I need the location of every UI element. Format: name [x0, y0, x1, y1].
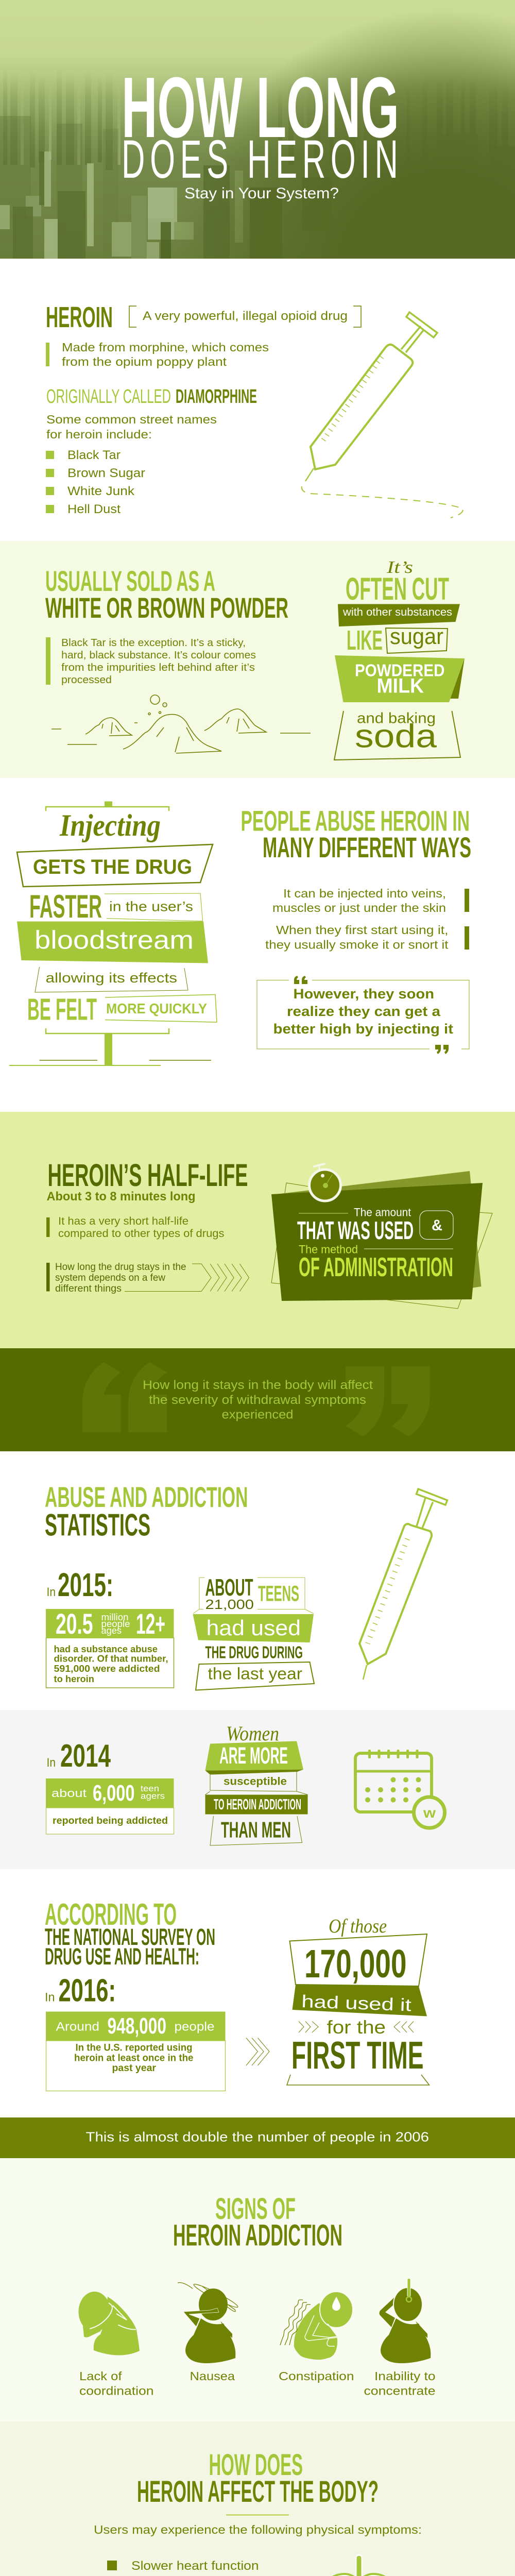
heading: usually sold	[45, 565, 288, 624]
stat card: 20.5 million: ages	[101, 1625, 122, 1636]
often cut typographic block: soda	[355, 717, 437, 754]
injecting signpost: in the user’s	[109, 899, 193, 914]
icon: constipation	[280, 2292, 353, 2360]
quote text: the severity of withdrawal symptoms	[149, 1393, 366, 1407]
methods of use: When they first start using it,	[276, 923, 448, 937]
panel: national survey 2016	[0, 1869, 515, 2117]
street names list: Black Tar	[67, 448, 121, 462]
heading: according to	[45, 1897, 215, 1970]
short half-life note	[46, 1215, 224, 1240]
street names intro: for heroin include:	[46, 428, 152, 441]
heading: signs: HEROIN ADDICTION	[173, 2218, 342, 2252]
methods of use: they usually smoke it or snort it	[265, 938, 449, 951]
stat card: 948,000 people: In the U.S. reported using	[75, 2042, 193, 2054]
often cut typographic block: with other substances	[342, 606, 452, 618]
injecting signpost: MORE QUICKLY	[106, 1001, 207, 1016]
often cut typographic block: LIKE	[347, 625, 383, 656]
title: how long does heroin: Stay in Your System?	[184, 185, 339, 202]
heading: signs	[173, 2192, 342, 2252]
icon: lack of coordination	[78, 2292, 140, 2355]
women susceptible typographic block: ARE MORE	[219, 1742, 288, 1769]
first time typographic block	[287, 1916, 430, 2085]
black tar note: from the impurities left behind after it’s	[61, 662, 255, 673]
icon: heart with exclamation	[325, 2554, 392, 2576]
street names intro	[46, 413, 217, 441]
icon: syringe	[359, 1489, 447, 1680]
panel: half-life	[0, 1112, 515, 1348]
stat card: 6,000 teenagers: agers	[141, 1791, 165, 1801]
year: 2016: In	[45, 1991, 55, 2004]
definition in brackets	[129, 306, 361, 327]
city skyline photo	[0, 0, 515, 260]
first time typographic block: 170,000	[304, 1942, 407, 1986]
injecting signpost: Injecting	[59, 808, 161, 842]
icon: syringe	[302, 312, 463, 518]
often cut typographic block: MILK	[377, 675, 424, 698]
stat card: 948,000 people: Around	[56, 2020, 99, 2034]
injecting signpost: FASTER	[29, 889, 102, 925]
stat card: 948,000 people: 948,000	[107, 2013, 166, 2039]
stat card: 948,000 people: past year	[112, 2063, 157, 2074]
street names list: Brown Sugar	[67, 466, 145, 480]
heading: statistics	[45, 1481, 248, 1543]
first time typographic block: for the	[327, 2016, 386, 2038]
street names list: White Junk	[67, 484, 135, 498]
injecting signpost: BE FELT	[27, 992, 97, 1026]
sign labels: Constipation	[279, 2369, 354, 2383]
callout: injecting quote	[257, 976, 469, 1054]
arrow: chevrons	[246, 2038, 269, 2065]
stat card: 6,000 teenagers: 6,000	[93, 1781, 135, 1806]
teens typographic block: 21,000	[205, 1597, 254, 1612]
stat card: 948,000 people	[46, 2011, 226, 2091]
dependency note	[46, 1262, 186, 1294]
stat card: 20.5 million: to heroin	[54, 1674, 94, 1684]
sign labels: Nausea	[190, 2369, 235, 2383]
year: 2015: 2015:	[58, 1566, 113, 1603]
stat card: 6,000 teenagers: about	[52, 1787, 87, 1800]
banner: almost double	[0, 2117, 515, 2158]
dependency note: system depends on a few	[55, 1273, 165, 1283]
icon: nausea	[178, 2282, 239, 2363]
stat card: 20.5 million: million	[101, 1612, 129, 1622]
teens typographic block: TEENS	[258, 1582, 299, 1606]
icon: powder piles	[52, 695, 311, 753]
injecting signpost: bloodstream	[35, 925, 194, 954]
icon: calendar: w	[423, 1805, 436, 1821]
arrow: chevrons	[125, 1264, 249, 1291]
methods of use: muscles or just under the skin	[272, 901, 446, 914]
year: 2015: In	[46, 1585, 56, 1599]
subheading: diamorphine: DIAMORPHINE	[176, 386, 257, 408]
quote text: experienced	[221, 1408, 294, 1422]
stat card: 20.5 million: 591,000 were addicted	[54, 1664, 160, 1674]
heading: many different ways	[241, 805, 471, 863]
heading: how does heroin affect: HOW DOES	[209, 2448, 303, 2482]
women susceptible typographic block: TO HEROIN ADDICTION	[214, 1797, 301, 1813]
stat card: 6,000 teenagers: teen	[141, 1784, 159, 1793]
card: amount and method: &	[432, 1217, 442, 1234]
icon: inability to concentrate	[379, 2278, 431, 2363]
heading: half-life: HEROIN’S HALF-LIFE	[47, 1158, 248, 1193]
icon: calendar	[355, 1750, 445, 1828]
heading: usually sold: USUALLY SOLD AS A	[45, 565, 215, 597]
methods of use: It can be injected into veins,	[283, 887, 446, 900]
heading: heroin: HEROIN	[46, 301, 113, 334]
heading: half-life: About 3 to 8 minutes long	[46, 1190, 196, 1204]
panel: injecting and ways of abuse	[0, 778, 515, 1112]
physical symptoms list	[107, 2559, 268, 2576]
women susceptible typographic block: susceptible	[224, 1775, 287, 1788]
first time typographic block: FIRST TIME	[291, 2033, 423, 2077]
panel: 2014 women statistics	[0, 1710, 515, 1869]
card: amount and method: The method	[299, 1243, 358, 1256]
injecting signpost: GETS THE DRUG	[33, 856, 192, 878]
morphine note: Made from morphine, which comes	[62, 341, 269, 354]
stat card: 6,000 teenagers: reported being addicted	[53, 1816, 168, 1826]
teens typographic block: ABOUT	[205, 1574, 253, 1601]
year: 2014: In	[46, 1756, 56, 1770]
quote text: How long it stays in the body will affect	[143, 1378, 373, 1392]
stat card: 20.5 million: people	[101, 1619, 130, 1629]
sign labels	[79, 2369, 436, 2398]
heading: according to: DRUG USE AND HEALTH:	[45, 1943, 199, 1970]
callout: injecting quote: better high by injecting it	[273, 1021, 453, 1037]
panel: abuse and addiction statistics	[0, 1451, 515, 1710]
heading: signs: SIGNS OF	[215, 2192, 296, 2226]
year: 2016: 2016:	[59, 1973, 116, 2008]
teens typographic block: THE DRUG DURING	[205, 1642, 303, 1662]
panel: what is heroin	[0, 259, 515, 541]
stat card: 948,000 people: heroin at least once in the	[74, 2053, 194, 2064]
heading: half-life	[46, 1158, 248, 1204]
icon: stopwatch	[309, 1164, 341, 1201]
street names list: Hell Dust	[67, 502, 121, 516]
black tar note: Black Tar is the exception. It’s a sticky,	[61, 637, 246, 649]
card: amount and method: The amount	[354, 1206, 411, 1219]
injecting signpost: allowing its effects	[45, 970, 177, 986]
dependency note: different things	[55, 1283, 122, 1294]
quote text	[143, 1378, 373, 1422]
definition in brackets: A very powerful, illegal opioid drug	[143, 309, 348, 323]
panel: severity quote band	[0, 1348, 515, 1451]
card: amount and method	[271, 1164, 492, 1309]
heading: how does heroin affect	[137, 2448, 379, 2509]
often cut typographic block: and baking	[357, 710, 436, 726]
heading: statistics: STATISTICS	[45, 1507, 150, 1543]
short half-life note: It has a very short half-life	[58, 1215, 188, 1227]
heading: according to: ACCORDING TO	[45, 1897, 177, 1931]
decorative quote marks	[82, 1362, 430, 1436]
sign labels: concentrate	[364, 2384, 436, 2398]
often cut typographic block: It’s	[386, 558, 413, 577]
first time typographic block: Of those	[329, 1916, 387, 1937]
teens typographic block: the last year	[208, 1664, 302, 1683]
physical symptoms list: Slower heart function	[131, 2559, 259, 2573]
year: 2015	[46, 1566, 113, 1603]
stat card: 20.5 million: disorder. Of that number,	[54, 1654, 168, 1664]
stat card: 948,000 people: people	[174, 2020, 214, 2034]
title: how long does heroin	[122, 60, 399, 202]
short half-life note: compared to other types of drugs	[58, 1228, 224, 1240]
panel: how heroin affects the body	[0, 2421, 515, 2576]
morphine note: from the opium poppy plant	[62, 355, 227, 368]
black tar note	[46, 637, 256, 686]
title: how long does heroin: DOES HEROIN	[122, 130, 398, 190]
first time typographic block: had used it	[301, 1992, 412, 2015]
panel: signs of heroin addiction	[0, 2158, 515, 2421]
panel: hero banner	[0, 0, 515, 260]
injecting signpost	[9, 802, 217, 1065]
year: 2016	[45, 1973, 116, 2008]
subheading: diamorphine: ORIGINALLY CALLED	[46, 386, 171, 408]
dependency note: How long the drug stays in the	[55, 1262, 186, 1273]
stat card: 6,000 teenagers	[46, 1778, 174, 1834]
often cut typographic block: POWDERED	[355, 660, 445, 680]
teens typographic block	[193, 1574, 314, 1690]
stat card: 20.5 million	[46, 1607, 174, 1688]
intro text: Users may experience the following physical symptoms:	[94, 2523, 422, 2536]
women susceptible typographic block	[205, 1722, 308, 1845]
card: amount and method: THAT WAS USED	[297, 1217, 414, 1245]
sign labels: coordination	[79, 2384, 153, 2398]
sign labels: Lack of	[79, 2369, 122, 2383]
year: 2014: 2014	[60, 1738, 111, 1774]
often cut typographic block	[334, 558, 465, 760]
panel: white or brown powder	[0, 541, 515, 778]
teens typographic block: had used	[206, 1616, 301, 1640]
heading: statistics: ABUSE AND ADDICTION	[45, 1481, 248, 1513]
heading: usually sold: WHITE OR BROWN POWDER	[45, 591, 288, 624]
black tar note: hard, black substance. It’s colour comes	[61, 650, 256, 661]
street names list	[46, 448, 145, 516]
year: 2014	[46, 1738, 111, 1774]
black tar note: processed	[61, 674, 112, 686]
sign labels: Inability to	[374, 2369, 436, 2383]
callout: injecting quote: However, they soon	[294, 986, 434, 1002]
often cut typographic block: sugar	[390, 624, 443, 649]
stat card: 20.5 million: had a substance abuse	[54, 1644, 158, 1654]
street names intro: Some common street names	[46, 413, 217, 426]
women susceptible typographic block: THAN MEN	[221, 1818, 291, 1842]
heading: according to: THE NATIONAL SURVEY ON	[45, 1924, 215, 1950]
women susceptible typographic block: Women	[226, 1722, 279, 1745]
stat card: 20.5 million: 20.5	[56, 1607, 93, 1640]
stat card: 20.5 million: 12+	[136, 1607, 165, 1640]
callout: injecting quote: realize they can get a	[287, 1004, 441, 1019]
morphine note	[46, 341, 269, 368]
banner: almost double: This is almost double the number of people in 2006	[85, 2129, 429, 2144]
methods of use	[265, 887, 469, 951]
